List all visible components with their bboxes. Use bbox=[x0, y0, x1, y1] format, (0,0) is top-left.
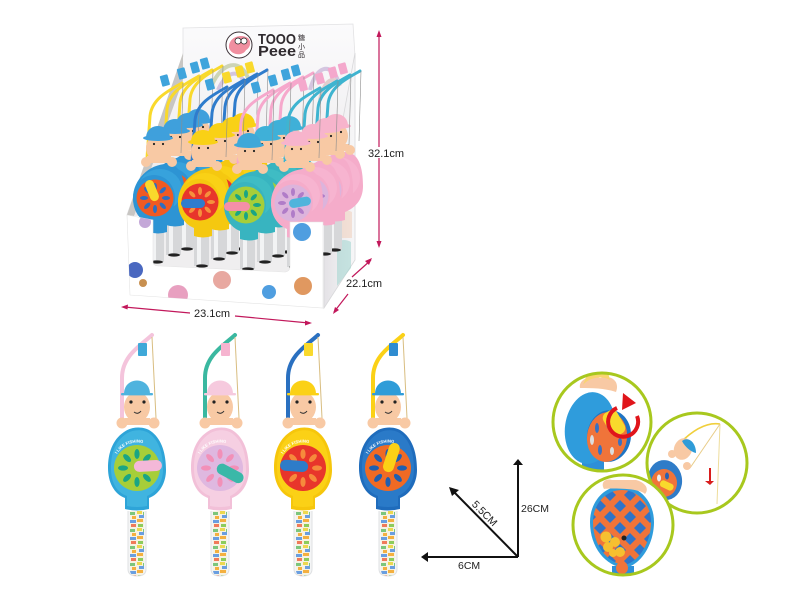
row of toys second bbox=[150, 67, 340, 264]
box back panel brand logo: 小 bbox=[298, 42, 305, 51]
box toy: pink bbox=[271, 79, 323, 269]
toy 4: blue and orange reel: I LIKE FISHING bbox=[366, 440, 394, 454]
box left inner flap bbox=[127, 53, 183, 216]
detail circle: fishing line drops bbox=[645, 413, 747, 513]
dimension: height 32.1cm: 32.1cm bbox=[368, 148, 404, 160]
box back panel brand logo: Peee bbox=[258, 43, 296, 60]
box toy: blue bbox=[133, 74, 185, 264]
toy 1: blue and green reel bbox=[108, 332, 166, 576]
row of toys third bbox=[163, 61, 353, 258]
box back panel brand logo: 品 bbox=[298, 51, 305, 59]
box back panel bbox=[127, 24, 355, 222]
box toy: yellow bbox=[178, 78, 230, 268]
box back panel brand logo: 糖 bbox=[298, 33, 305, 42]
dimension: depth 22.1cm bbox=[333, 258, 382, 314]
size diagram arrows bbox=[421, 459, 549, 572]
red down arrow bbox=[705, 468, 714, 485]
label: 26CM: 26CM bbox=[521, 503, 549, 515]
dimension: height 32.1cm bbox=[368, 30, 404, 248]
box back panel brand logo bbox=[226, 31, 305, 60]
dimension: depth 22.1cm: 22.1cm bbox=[346, 278, 382, 290]
row of toys at the back bbox=[173, 57, 363, 254]
pastel rainbow arcs on back panel bbox=[212, 65, 340, 100]
label: 6CM: 6CM bbox=[458, 560, 480, 572]
dimension: width 23.1cm: 23.1cm bbox=[194, 308, 230, 320]
display box bbox=[127, 24, 363, 308]
red rotation arrow bbox=[608, 393, 638, 437]
detail circle: candy lattice bbox=[573, 475, 673, 580]
box back panel brand logo: TOOO bbox=[258, 31, 296, 48]
dimension: width 23.1cm bbox=[121, 304, 312, 326]
box toy: teal bbox=[224, 81, 276, 271]
toy 3: yellow and red reel: I LIKE FISHING bbox=[280, 440, 310, 454]
toy 2: pink reel bbox=[191, 332, 249, 576]
toy 4: blue and orange reel bbox=[359, 332, 417, 576]
box front panel with dots bbox=[127, 215, 323, 308]
detail circle: rotate the reel bbox=[553, 372, 651, 473]
box floor bbox=[153, 220, 290, 272]
toy 1: blue and green reel: I LIKE FISHING bbox=[114, 440, 144, 454]
label: 5.5CM: 5.5CM bbox=[469, 499, 499, 529]
toy 3: yellow and red reel bbox=[274, 332, 332, 576]
toy 2: pink reel: I LIKE FISHING bbox=[198, 440, 226, 454]
right side panel bbox=[324, 53, 355, 308]
